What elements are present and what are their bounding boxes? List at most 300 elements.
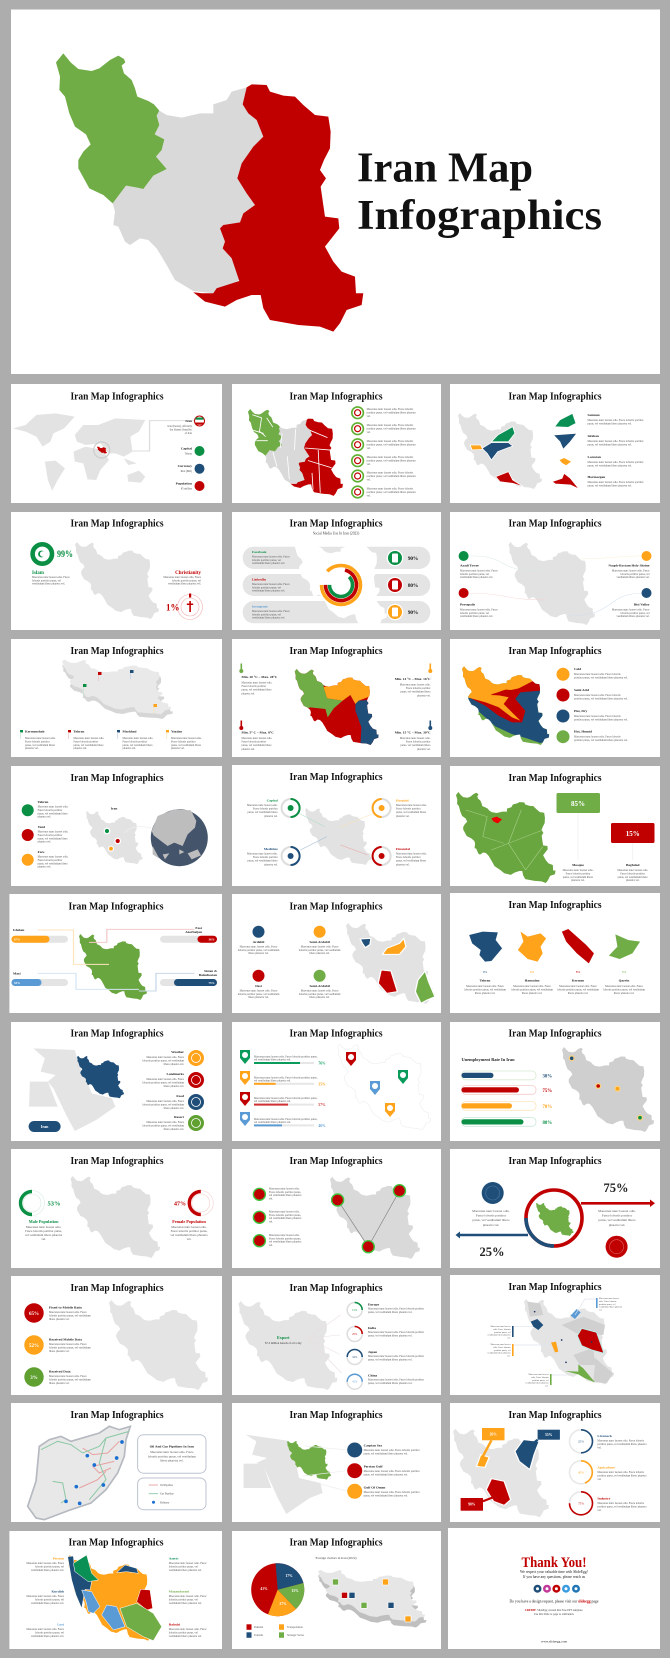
world map — [13, 413, 197, 491]
sector text: Maecenas nunc laoreet odio. Fusce lobortis — [597, 1440, 644, 1442]
province labels: Maecenas nunc laoreet odio. Fusce — [559, 985, 598, 988]
description box — [138, 1435, 206, 1473]
pie legend: Strategic Sector — [287, 1634, 304, 1637]
Iran green — [287, 1440, 331, 1480]
value callouts — [461, 1428, 560, 1511]
left pill text: Facebook — [252, 550, 266, 554]
province list: libero pharetra vel. — [309, 996, 330, 999]
province labels: lobortis porttitor purus, vel vestibulum — [603, 988, 646, 991]
landmark text: vestibulum libero pharetra vel. — [460, 615, 493, 618]
left labels: Maecenas nunc laoreet odio. Fusce — [26, 1595, 65, 1598]
left pill text: vestibulum libero pharetra vel. — [252, 562, 285, 565]
export text: 34% — [352, 1356, 358, 1359]
percent and faces: 75% — [604, 1181, 628, 1195]
sea list: purus, vel vestibulum libero pharetra vel. — [364, 1473, 408, 1476]
Christianity text: Maecenas nunc laoreet odio. Fusce — [163, 576, 202, 579]
slide: landmarks — [450, 512, 660, 630]
info: currency: Currency — [178, 464, 192, 468]
feature list: lobortis porttitor purus, vel vestibulum — [142, 1059, 185, 1062]
value callouts: 55% — [545, 1433, 553, 1437]
population text: Maecenas nunc laoreet odio. — [171, 1225, 207, 1229]
message: If you have any questions, please reach us — [523, 1575, 586, 1580]
left pill text — [252, 550, 290, 620]
map with dots — [86, 806, 151, 864]
slide: sector callouts — [450, 1403, 660, 1522]
progress bars: 67% — [14, 938, 20, 942]
list: six icon rows: vel. — [367, 431, 371, 434]
province labels: libero pharetra vel. — [475, 992, 496, 995]
title: Iran Map Infographics — [290, 645, 383, 657]
female ring — [174, 1190, 213, 1216]
province labels: 9% — [483, 970, 487, 974]
legend box: Oil Pipeline — [160, 1484, 174, 1487]
connectors — [299, 813, 374, 855]
feature list: Maecenas nunc laoreet odio. Fusce — [146, 1056, 185, 1059]
subtitle: Foreign visitors in Iran (2022) — [315, 1556, 357, 1560]
value circles: 3% — [30, 1376, 38, 1381]
title: Iran Map Infographics — [70, 645, 164, 657]
layered map — [462, 666, 550, 745]
list: six icon rows: Maecenas nunc laoreet odio. Fusce lobortis — [367, 440, 413, 443]
map with export label — [238, 1301, 337, 1390]
landmark text: lobortis porttitor purus, vel — [460, 612, 489, 615]
title: Iran Map Infographics — [290, 1282, 383, 1294]
info: population — [176, 481, 204, 491]
info: country: the Islamic Republic — [170, 428, 193, 432]
left pill text: vestibulum libero pharetra vel. — [252, 590, 285, 593]
slide: connected cities — [232, 1149, 441, 1268]
comparison text — [472, 1209, 636, 1227]
list: six icon rows: vel. — [367, 415, 371, 418]
population text: Fusce lobortis porttitor purus, — [25, 1229, 62, 1234]
sector text: Fusce lobortis porttitor — [396, 856, 421, 859]
bars and text: vel vestibulum libero pharetra vel. — [254, 1121, 291, 1124]
province list: Maecenas nunc laoreet odio. Fusce — [240, 946, 278, 948]
feature list: Maecenas nunc laoreet odio. Fusce — [146, 1100, 185, 1103]
legend box — [138, 1478, 206, 1510]
feature list: Food — [176, 1094, 184, 1098]
left labels: vestibulum libero pharetra vel. — [31, 1602, 64, 1605]
region shapes — [470, 413, 579, 489]
feature list: libero pharetra vel. — [164, 1085, 184, 1088]
list: six icon rows: porttitor purus, vel vestibulum libero pharetra — [367, 412, 417, 414]
sea list: purus, vel vestibulum libero pharetra vel. — [364, 1494, 408, 1497]
bars: 75% — [542, 1089, 552, 1094]
legend columns: Maecenas nunc laoreet odio. — [171, 737, 202, 740]
province labels: 6% — [530, 970, 534, 974]
info: country: of Iran — [185, 432, 193, 435]
hero panel — [11, 10, 660, 374]
province list: lobortis porttitor purus, vel vestibulum — [238, 993, 280, 996]
info: currency — [178, 464, 204, 474]
bars and text: 57% — [318, 1103, 326, 1107]
pie legend: Pakistan — [254, 1626, 264, 1629]
climate list: porttitor purus, vel vestibulum libero pharetra vel. — [574, 718, 628, 722]
sea list: Maecenas nunc laoreet odio. Fusce lobortis porttitor — [364, 1491, 420, 1494]
sector text: Maecenas nunc laoreet odio. Fusce lobortis — [597, 1471, 644, 1474]
slide: social media — [232, 512, 441, 630]
city list: Fusce lobortis porttitor — [38, 809, 62, 812]
callout notes: vel. — [599, 1310, 603, 1312]
feature list: Maecenas nunc laoreet odio. Fusce — [146, 1121, 185, 1124]
callout notes — [487, 1298, 622, 1388]
feature list: lobortis porttitor purus, vel vestibulum — [142, 1081, 185, 1084]
landmark text: lobortis porttitor purus, vel — [621, 573, 650, 576]
bar labels: Sistan & — [204, 969, 217, 973]
list: six icon rows: vel. — [367, 447, 371, 450]
climate map — [294, 669, 379, 745]
title: Iran Map Infographics — [508, 518, 602, 530]
legend columns: Maecenas nunc laoreet odio. — [122, 737, 154, 740]
zone text: Fusce lobortis porttitor — [406, 741, 431, 744]
hero Iran map in three colours — [56, 53, 363, 332]
zone text: Fusce lobortis porttitor — [406, 687, 431, 690]
usage text: lobortis porttitor purus, vel vestibulum — [49, 1346, 91, 1349]
usage text: Maecenas nunc laoreet odio. Fusce — [49, 1343, 87, 1346]
social icons — [534, 1585, 580, 1593]
landmark text: Naqsh-Rostam Holy Shrine — [608, 564, 650, 568]
province labels: Maecenas nunc laoreet odio. Fusce — [605, 985, 644, 988]
province labels: Tehran — [480, 978, 490, 982]
slide: 75 25 comparison — [450, 1149, 660, 1268]
legend columns: Yazdan — [171, 730, 182, 734]
legend columns: pharetra vel. — [25, 747, 39, 750]
chart heading: Unemployment Rate In Iran — [462, 1057, 515, 1062]
zone text: Maecenas nunc laoreet odio. — [400, 737, 431, 740]
province list: Ardabil — [253, 940, 264, 944]
pie chart: 15% — [291, 1589, 299, 1593]
climate list: Maecenas nunc laoreet odio. Fusce lobortis — [574, 694, 621, 697]
legend columns: pharetra vel. — [74, 747, 87, 750]
description box: Oil And Gas Pipelines In Iran — [150, 1444, 194, 1448]
city list: Maecenas nunc laoreet odio. — [38, 856, 69, 858]
export text: India — [368, 1326, 376, 1330]
zone text: pharetra vel. — [242, 692, 255, 695]
route markers — [253, 1185, 406, 1253]
usage text: libero pharetra vel. — [49, 1350, 70, 1353]
usage text: Maecenas nunc laoreet odio. Fusce — [49, 1311, 87, 1314]
city list: Maecenas nunc laoreet odio. — [38, 830, 69, 834]
slide: world location — [11, 384, 222, 503]
left labels: Persian — [53, 1556, 64, 1560]
sector text: Maecenas nunc laoreet odio. — [396, 804, 427, 807]
sector text: Capital — [267, 798, 278, 802]
region descriptions: purus, vel vestibulum libero pharetra vel. — [588, 422, 632, 426]
export text: Maecenas nunc laoreet odio. Fusce lobortis porttitor — [368, 1378, 424, 1382]
climate list: Maecenas nunc laoreet odio. Fusce lobortis — [574, 715, 621, 718]
sector text: 45% — [578, 1470, 584, 1474]
slide: unemployment — [450, 1022, 660, 1141]
callout notes: vel. — [507, 1338, 511, 1340]
title: Iran Map Infographics — [290, 771, 383, 783]
climate list: Maecenas nunc laoreet odio. Fusce lobortis — [574, 673, 621, 676]
province labels: 5% — [622, 970, 626, 974]
white map cutout — [295, 534, 387, 624]
export text: Maecenas nunc laoreet odio. Fusce lobortis porttitor — [368, 1355, 424, 1358]
route text: Maecenas nunc laoreet odio. — [269, 1188, 300, 1190]
message: We respect your valuable time with SlideEgg! — [520, 1570, 588, 1574]
legend columns: Tehran — [74, 730, 84, 734]
Islam text: Islam — [32, 571, 45, 576]
left labels: Luri — [57, 1622, 64, 1626]
export text — [352, 1302, 424, 1385]
route text: vel. — [269, 1244, 273, 1247]
callout notes: odio. Fusce lobortis — [493, 1329, 511, 1331]
zone text: purus, vel vestibulum libero — [400, 691, 431, 694]
sector text: Agriculture — [597, 1466, 615, 1470]
map — [75, 542, 159, 619]
sector text: Livestock — [597, 1434, 612, 1438]
captions: Maecenas nunc laoreet odio. — [563, 869, 594, 872]
route text: vel vestibulum libero pharetra — [269, 1194, 302, 1197]
callout notes: vestibulum libero pharetra — [487, 1353, 511, 1355]
sector text: 75% — [578, 1502, 584, 1506]
sector text: pharetra vel. — [396, 863, 410, 866]
usage text: libero pharetra vel. — [49, 1318, 70, 1321]
legend columns: Maecenas nunc laoreet odio. — [74, 737, 105, 740]
zone text: purus, vel vestibulum libero — [242, 689, 272, 692]
usage text: Received Data — [49, 1370, 71, 1374]
landmark text: vestibulum libero pharetra vel. — [616, 615, 650, 618]
captions: purus, vel vestibulum libero — [563, 876, 594, 879]
list: six icon rows: vel. — [367, 494, 371, 498]
zone text: pharetra vel. — [417, 694, 431, 697]
bars and text: Maecenas nunc laoreet odio. Fusce lobortis porttitor purus, — [254, 1056, 318, 1058]
city list: purus, vel vestibulum libero — [38, 812, 68, 815]
climate list: porttitor purus, vel vestibulum libero pharetra vel. — [574, 698, 628, 700]
city list: purus, vel vestibulum libero — [38, 837, 68, 840]
landmark text: vestibulum libero pharetra vel. — [616, 576, 650, 579]
sea list: purus, vel vestibulum libero pharetra vel. — [364, 1452, 408, 1455]
city list: pharetra vel. — [38, 816, 51, 819]
city list: Tehran — [38, 800, 48, 804]
bar labels — [13, 926, 217, 977]
city list: Maecenas nunc laoreet odio. — [38, 806, 69, 808]
info: population: 85 million — [181, 488, 193, 490]
slide: thank you — [448, 1528, 660, 1649]
route text — [269, 1188, 302, 1247]
left pill text: Maecenas nunc laoreet odio. Fusce — [252, 610, 290, 613]
sector text: porttitor purus, vel vestibulum libero pharetra — [597, 1474, 647, 1477]
value callouts: 26% — [490, 1432, 497, 1436]
list: six icon rows: Maecenas nunc laoreet odio. Fusce lobortis — [367, 472, 413, 474]
zone text: Min. 15 °C – Max. 30°C — [395, 730, 431, 734]
sector text: pharetra vel. — [396, 815, 410, 818]
province list: lobortis porttitor purus, vel vestibulum — [299, 949, 341, 952]
route text: Maecenas nunc laoreet odio. — [269, 1234, 300, 1237]
callout notes: odio. Fusce lobortis — [599, 1301, 616, 1303]
slide: four regions — [450, 384, 660, 503]
title: Iran Map Infographics — [508, 772, 602, 784]
callout notes: vel. — [545, 1386, 549, 1388]
feature list: libero pharetra vel. — [164, 1107, 184, 1110]
description box: Maecenas nunc laoreet odio. Fusce — [150, 1450, 194, 1454]
feature list — [142, 1050, 204, 1131]
heading: Thank You! — [522, 1555, 586, 1571]
left pill text: lobortis porttitor purus, vel — [252, 586, 281, 589]
zone text: purus, vel vestibulum libero — [400, 744, 431, 747]
sector text: Maecenas nunc laoreet odio. — [396, 852, 427, 856]
export text: 41% — [352, 1381, 358, 1384]
Iran navy — [77, 1056, 124, 1098]
zone text: Min. 14 °C – Max. 16°C — [395, 677, 431, 681]
title: Iran Map Infographics — [508, 1409, 602, 1421]
climate list: porttitor purus, vel vestibulum libero pharetra vel. — [574, 676, 628, 680]
info: capital: Tehran — [185, 452, 193, 456]
climate list: Hot, Humid — [574, 730, 592, 734]
title: Iran Map Infographics — [290, 518, 383, 530]
slide: religion — [11, 512, 222, 630]
province list: libero pharetra vel. — [309, 952, 330, 955]
population text — [25, 1219, 208, 1241]
left pill text: lobortis porttitor purus, vel — [252, 559, 281, 562]
sea list: Gulf Of Oman — [364, 1486, 385, 1490]
callout notes: Maecenas nunc laoreet — [528, 1374, 549, 1376]
province labels: libero pharetra vel. — [522, 992, 543, 995]
comparison text: pharetra vel. — [609, 1223, 625, 1227]
export text: 15% — [352, 1309, 358, 1312]
map with regions — [458, 413, 542, 489]
credit: Use this Slide to page to attribution. — [534, 1613, 574, 1616]
list: six icon rows: Maecenas nunc laoreet odio. Fusce lobortis — [367, 488, 413, 490]
slide: divided provinces — [232, 384, 441, 503]
Iran pill — [29, 1121, 61, 1132]
zone text: Fusce lobortis porttitor — [242, 741, 266, 744]
sector text: pharetra vel. — [264, 815, 278, 818]
left pill text: Maecenas nunc laoreet odio. Fusce — [252, 583, 290, 586]
map markers — [332, 1579, 411, 1622]
captions: Fusce lobortis porttitor — [620, 872, 645, 875]
usage text: Received Mobile Data — [49, 1338, 82, 1342]
captions: Maecenas nunc laoreet odio. — [617, 869, 648, 872]
route text: vel vestibulum libero pharetra — [269, 1217, 302, 1220]
export text: 25% — [352, 1333, 358, 1336]
callout notes: Maecenas nunc laoreet — [490, 1344, 511, 1346]
comparison text: Maecenas nunc laoreet odio. — [598, 1209, 636, 1213]
right icons and values: 80% — [408, 583, 418, 589]
comparison text: Fusce lobortis porttitor — [476, 1214, 507, 1218]
map — [346, 923, 435, 1004]
city list: Fars — [38, 850, 45, 854]
website: www.slideegg.com — [541, 1640, 567, 1644]
connector curves — [470, 556, 641, 616]
sector text: vel. — [597, 1478, 602, 1481]
legend columns — [20, 730, 202, 750]
right labels: Maecenas nunc laoreet odio. Fusce — [169, 1628, 207, 1631]
bars: 80% — [542, 1121, 552, 1126]
hero title — [357, 146, 602, 239]
province list — [238, 926, 341, 999]
sector text: porttitor purus, vel vestibulum libero pharetra — [597, 1443, 647, 1446]
info: population: Population — [176, 482, 192, 486]
title: Iran Map Infographics — [70, 518, 164, 530]
route text: Maecenas nunc laoreet odio. — [269, 1210, 300, 1214]
slide: four highlighted provinces — [232, 894, 441, 1013]
province labels: Maecenas nunc laoreet odio. Fusce — [466, 985, 505, 988]
map — [305, 808, 372, 865]
province list: lobortis porttitor purus, vel vestibulum — [238, 949, 280, 952]
title: Iran Map Infographics — [68, 1536, 164, 1548]
Middle East map — [29, 1048, 115, 1131]
sector text: Maecenas nunc laoreet odio. — [247, 804, 278, 807]
right labels: lobortis porttitor purus, vel — [169, 1565, 198, 1568]
slide: four province shapes — [450, 893, 660, 1013]
radial bar chart — [313, 557, 369, 613]
legend columns: Fusce lobortis porttitor — [25, 740, 50, 743]
progress bars: 53% — [14, 981, 20, 985]
Iran pill: Iran — [41, 1124, 49, 1129]
list: six icon rows: Maecenas nunc laoreet odio. Fusce lobortis — [367, 424, 413, 427]
list: six icon rows: porttitor purus, vel vestibulum libero pharetra — [367, 491, 417, 494]
sector text: Financial — [396, 847, 410, 851]
comparison text: purus, vel vestibulum libero — [472, 1218, 510, 1223]
left labels: lobortis porttitor purus, vel — [35, 1631, 64, 1634]
arrows — [456, 1200, 655, 1238]
title: Iran Map Infographics — [290, 1409, 383, 1421]
region descriptions: Lorestan — [588, 455, 601, 459]
map — [508, 542, 595, 625]
population text: Fusce lobortis porttitor purus, — [171, 1229, 208, 1234]
3D map — [62, 660, 173, 719]
legend columns: pharetra vel. — [122, 747, 136, 750]
pie chart: 41% — [260, 1587, 268, 1591]
population text: vel vestibulum libero pharetra — [170, 1233, 208, 1237]
feature list: Weather — [171, 1050, 184, 1054]
legend box: Refinery — [160, 1501, 170, 1504]
export text: purus, vel vestibulum libero pharetra vel. — [368, 1358, 413, 1361]
province list: Desi — [255, 984, 262, 988]
sector text: Fusce lobortis porttitor — [253, 856, 278, 859]
slide: pipelines — [11, 1403, 222, 1522]
captions: Fusce lobortis porttitor — [566, 872, 590, 875]
province labels: libero pharetra vel. — [614, 992, 635, 995]
value circles — [24, 1303, 44, 1387]
region descriptions: Maecenas nunc laoreet odio. Fusce lobortis porttitor — [588, 440, 644, 443]
captions: pharetra vel. — [626, 879, 640, 882]
feature list: libero pharetra vel. — [164, 1128, 184, 1131]
outline map — [338, 1044, 431, 1130]
sea list: Caspian Sea — [364, 1444, 382, 1448]
city list: Fusce lobortis porttitor — [38, 834, 62, 837]
rings — [282, 799, 391, 865]
landmark text: Maecenas nunc laoreet odio. Fusce — [612, 608, 650, 612]
zone text: Fusce lobortis porttitor — [242, 685, 266, 688]
slide: share percentages — [450, 766, 660, 886]
markers — [459, 551, 652, 598]
right labels: vestibulum libero pharetra vel. — [169, 1602, 202, 1605]
pie legend: Transportation — [287, 1626, 303, 1629]
slide: foreign visitors pie — [232, 1531, 441, 1649]
region descriptions: Hormozgan — [588, 475, 605, 479]
bars — [462, 1071, 552, 1126]
province labels: Maecenas nunc laoreet odio. Fusce — [513, 985, 552, 988]
callout notes: vestibulum libero pharetra — [599, 1307, 622, 1309]
region descriptions: Semnan — [588, 413, 600, 417]
sector text: porttitor purus, vel vestibulum libero pharetra — [597, 1505, 647, 1508]
sector rings — [570, 1430, 592, 1515]
list: six icon rows: porttitor purus, vel vestibulum libero pharetra — [367, 460, 417, 462]
zone text: Min. 20 °C – Max. 28°C — [242, 675, 278, 679]
bars and text: vel vestibulum libero pharetra vel. — [254, 1100, 291, 1103]
slide: shields and bars — [232, 1022, 441, 1141]
Christianity text: lobortis porttitor purus, vel — [172, 579, 201, 582]
title: Iran Map Infographics — [70, 390, 164, 402]
title: Iran Map Infographics — [508, 1028, 602, 1040]
captions: pharetra vel. — [571, 879, 585, 882]
description box: libero pharetra vel. — [160, 1459, 184, 1463]
legend columns: Fusce lobortis porttitor — [171, 740, 196, 743]
title: Iran Map Infographics — [68, 900, 164, 912]
